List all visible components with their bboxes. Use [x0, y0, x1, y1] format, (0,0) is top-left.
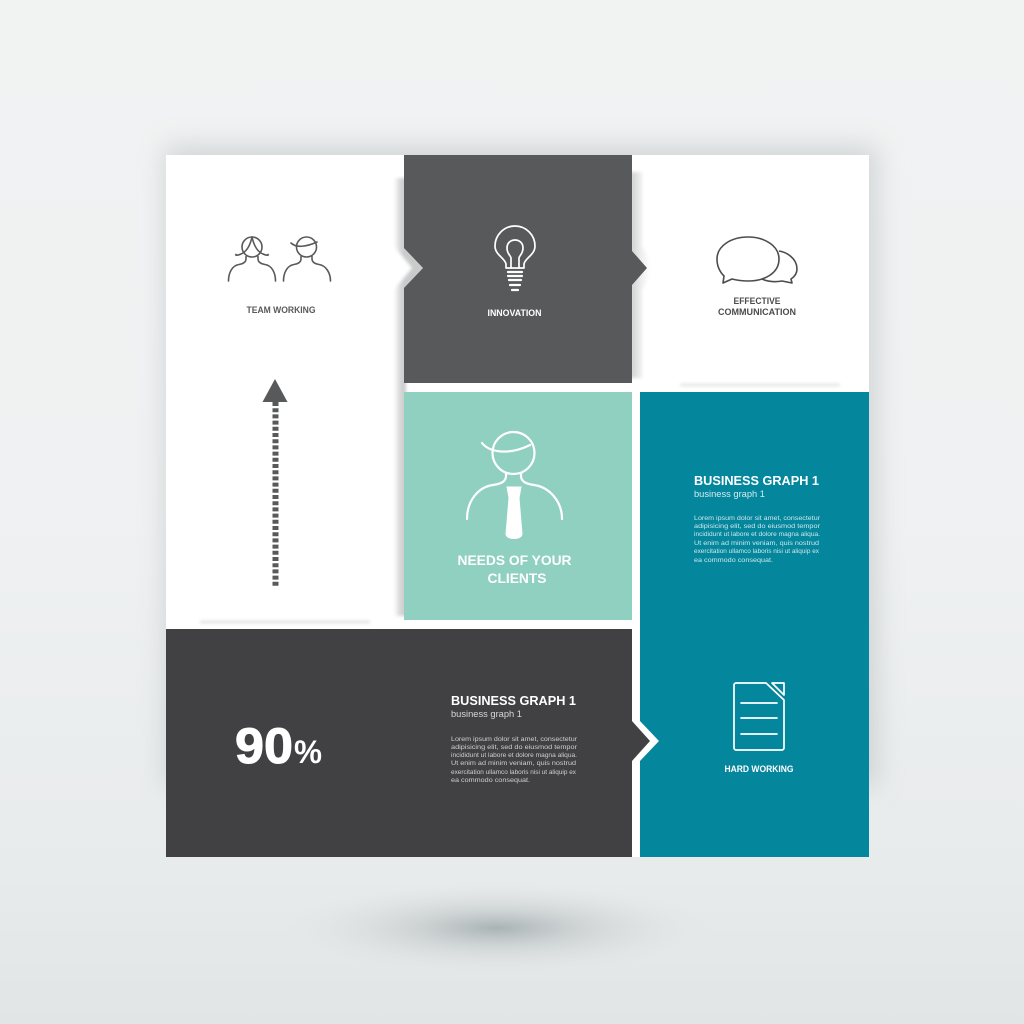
text block: business graph: business graph 1: [694, 489, 765, 500]
text block: business graph: Lorem ipsum dolor sit amet, consectetur: [694, 515, 821, 522]
icon: client with tie: [467, 432, 562, 538]
label: effective communication: COMMUNICATION: [718, 307, 796, 317]
panel: hard working: [640, 392, 869, 857]
text block: business graph: exercitation ullamco laboris nisi ut aliquip ex: [694, 548, 820, 555]
shadow strip: right of dark panel: [630, 172, 654, 378]
text block: business graph: [694, 473, 821, 564]
panel: effective communication: [640, 155, 869, 384]
shadow strip: left column chevron: [394, 178, 425, 616]
icon: speech bubbles: [717, 237, 797, 283]
text block: business graph: Ut enim ad minim veniam, quis nostrud: [451, 760, 576, 767]
text block: business graph: exercitation ullamco laboris nisi ut aliquip ex: [451, 769, 577, 776]
icon: team of two people: [228, 237, 330, 281]
label: needs of your clients: NEEDS OF YOUR: [458, 552, 572, 568]
arrow: dashed upward: [262, 379, 288, 587]
stat: 90 percent: 90: [235, 718, 293, 774]
white arrow outline: [632, 629, 659, 857]
icon: light bulb: [495, 226, 535, 290]
text block: business graph: ea commodo consequat.: [451, 777, 530, 784]
label: team working: TEAM WORKING: [246, 305, 316, 315]
text block: business graph: adipisicing elit, sed do eiusmod tempor: [451, 744, 578, 751]
text block: business graph: business graph 1: [451, 709, 522, 720]
label: hard working: HARD WORKING: [724, 764, 794, 774]
label: needs of your clients: CLIENTS: [488, 570, 546, 586]
label: innovation: INNOVATION: [488, 308, 542, 318]
text block: business graph: Ut enim ad minim veniam, quis nostrud: [694, 540, 819, 547]
shadow strip: under left panel: [200, 621, 370, 623]
card base: [166, 155, 869, 857]
text block: business graph: incididunt ut labore et dolore magna aliqua.: [694, 531, 820, 538]
text block: business graph: ea commodo consequat.: [694, 557, 773, 564]
text block: business graph: BUSINESS GRAPH 1: [451, 693, 576, 708]
text block: business graph: [451, 693, 578, 784]
panel: team working: [166, 155, 396, 620]
text block: business graph: incididunt ut labore et dolore magna aliqua.: [451, 752, 577, 759]
text block: business graph: BUSINESS GRAPH 1: [694, 473, 819, 488]
text block: business graph: Lorem ipsum dolor sit amet, consectetur: [451, 736, 578, 743]
panel: innovation: [404, 155, 647, 383]
icon: document: [734, 683, 784, 750]
shadow strip: under communication panel: [680, 384, 840, 386]
text block: business graph: adipisicing elit, sed do eiusmod tempor: [694, 523, 821, 530]
panel: percentage and business graph: [166, 629, 659, 857]
panel: needs of your clients: [404, 392, 632, 620]
label: effective communication: EFFECTIVE: [734, 296, 780, 306]
stat: 90 percent: %: [294, 734, 322, 770]
card back shadow: [165, 146, 877, 786]
floor shadow: [282, 882, 712, 974]
